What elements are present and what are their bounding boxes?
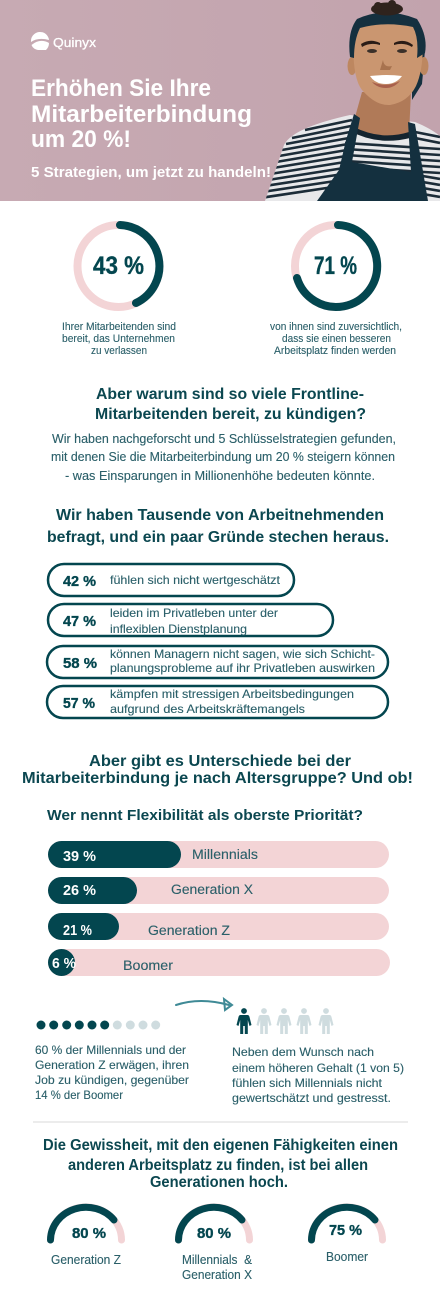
pill: 42 % [48, 564, 294, 596]
text: 60 %: Generation Z erwägen, ihren [35, 1058, 189, 1072]
bar: Boomer 6 %: Boomer [123, 958, 174, 973]
heading: survey: befragt, und ein paar Gründe stechen heraus. [47, 529, 389, 546]
pill: 47 %: 47 % [63, 613, 96, 630]
pill: 57 % [47, 686, 388, 718]
pill: 47 %: leiden im Privatleben unter der [110, 606, 278, 620]
bar: Millennials 39 %: Millennials [192, 847, 258, 862]
pill: 58 %: planungsprobleme auf ihr Privatleben auswirken [110, 661, 375, 675]
text: 60 %: 60 % der Millennials und der [35, 1043, 186, 1057]
heading: age groups [22, 753, 413, 787]
gauge: Generation Z 80 %: 80 % [72, 1225, 106, 1242]
title [31, 75, 252, 153]
donut: 43 % [78, 225, 160, 307]
heading: age groups: Aber gibt es Unterschiede bei der [89, 753, 351, 770]
gauge: Millennials & Generation X 80 % [178, 1207, 253, 1282]
bar: Boomer 6 % [48, 949, 390, 976]
text: 1 von 5: gewertschätzt und gestresst. [232, 1091, 391, 1105]
heading: confidence: Generationen hoch. [150, 1174, 288, 1191]
bar chart: flexibility [48, 841, 390, 976]
bar: Generation X 26 % [48, 877, 389, 904]
gauge: Boomer 75 %: Boomer [326, 1250, 368, 1264]
gauge: Generation Z 80 % [50, 1207, 122, 1267]
donut: 43 %: 43 % [93, 252, 144, 280]
text: 60 % [35, 1043, 189, 1102]
text: 1 von 5: einem höheren Gehalt (1 von 5) [232, 1061, 404, 1075]
heading: confidence: Die Gewissheit, mit den eigenen Fähigkeiten einen [43, 1137, 398, 1154]
title: Mitarbeiterbindung [31, 101, 252, 128]
text: 60 %: 14 % der Boomer [35, 1088, 123, 1102]
heading: why quit [95, 386, 366, 423]
heading: confidence [43, 1137, 398, 1191]
text: intro [51, 432, 396, 483]
caption: 71 %: dass sie einen besseren [282, 333, 391, 345]
gauge: Boomer 75 % [312, 1207, 382, 1264]
text: intro: Wir haben nachgeforscht und 5 Schlüsselstrategien gefunden, [52, 432, 396, 446]
pill: 47 %: inflexiblen Dienstplanung [110, 622, 247, 636]
arrow [176, 999, 232, 1010]
heading: why quit: Aber warum sind so viele Frontline- [96, 386, 364, 403]
heading: why quit: Mitarbeitenden bereit, zu kündigen? [95, 406, 366, 423]
icon: ten dots, six filled [36, 1020, 160, 1030]
bar: Boomer 6 %: 6 % [52, 955, 76, 972]
gauge: Millennials & Generation X 80 %: Millennials & [182, 1253, 253, 1267]
logo: Quinyx [31, 32, 97, 50]
text: intro: - was Einsparungen in Millionenhöhe bedeuten könnte. [65, 469, 375, 483]
bar: Generation X 26 %: Generation X [171, 882, 253, 897]
pill: 42 %: 42 % [63, 573, 96, 590]
caption: 43 %: zu verlassen [91, 345, 147, 357]
text: intro: mit denen Sie die Mitarbeiterbindung um 20 % steigern können [51, 450, 395, 464]
pill: 57 %: aufgrund des Arbeitskräftemangels [110, 702, 305, 716]
text: 1 von 5 [232, 1045, 404, 1105]
text: 1 von 5: fühlen sich Millennials nicht [232, 1076, 383, 1090]
gauge: Generation Z 80 %: Generation Z [51, 1253, 121, 1267]
caption: 43 % [62, 321, 176, 357]
text: 60 %: Job zu kündigen, gegenüber [35, 1073, 189, 1087]
subtitle: 5 Strategien, um jetzt zu handeln! [31, 165, 271, 181]
pill: 58 %: 58 % [63, 655, 97, 672]
heading: age groups: Mitarbeiterbindung je nach Altersgruppe? Und ob! [22, 770, 413, 787]
pill: 58 % [47, 646, 388, 678]
logo: Quinyx: Quinyx [53, 35, 97, 50]
title: um 20 %! [31, 126, 131, 153]
bar: Generation Z 21 %: Generation Z [148, 923, 230, 938]
gauge: Boomer 75 %: 75 % [329, 1222, 362, 1239]
title: Erhöhen Sie Ihre [31, 75, 211, 102]
bar: Millennials 39 % [48, 841, 389, 868]
photo: smiling worker in apron [260, 0, 440, 201]
heading: survey: Wir haben Tausende von Arbeitnehmenden [56, 507, 384, 524]
subheading: flexibility: Wer nennt Flexibilität als oberste Priorität? [47, 807, 363, 824]
donut: 71 % [295, 225, 377, 307]
bar: Millennials 39 %: 39 % [63, 848, 96, 865]
gauge: Millennials & Generation X 80 %: Generation X [182, 1268, 253, 1282]
heading: confidence: anderen Arbeitsplatz zu finden, ist bei allen [68, 1157, 368, 1174]
bar: Generation Z 21 % [48, 913, 389, 940]
caption: 71 %: von ihnen sind zuversichtlich, [270, 321, 402, 333]
bar: Generation X 26 %: 26 % [63, 882, 96, 899]
caption: 43 %: Ihrer Mitarbeitenden sind [62, 321, 176, 333]
caption: 71 %: Arbeitsplatz finden werden [274, 345, 396, 357]
caption: 71 % [270, 321, 402, 357]
pill: 58 %: können Managern nicht sagen, wie sich Schicht- [110, 647, 375, 661]
gauge: Millennials & Generation X 80 %: 80 % [197, 1225, 231, 1242]
pill: 57 %: 57 % [63, 695, 95, 712]
pill: 42 %: fühlen sich nicht wertgeschätzt [110, 573, 281, 587]
bar: Generation Z 21 %: 21 % [63, 922, 92, 939]
pill: 47 % [48, 604, 333, 636]
panel: hero header [0, 0, 440, 201]
heading: survey [47, 507, 389, 546]
text: 1 von 5: Neben dem Wunsch nach [232, 1045, 374, 1059]
icon: five people, one highlighted [236, 1008, 334, 1034]
caption: 43 %: bereit, das Unternehmen [62, 333, 175, 345]
donut: 71 %: 71 % [314, 252, 357, 280]
pill: 57 %: kämpfen mit stressigen Arbeitsbedingungen [110, 687, 354, 701]
